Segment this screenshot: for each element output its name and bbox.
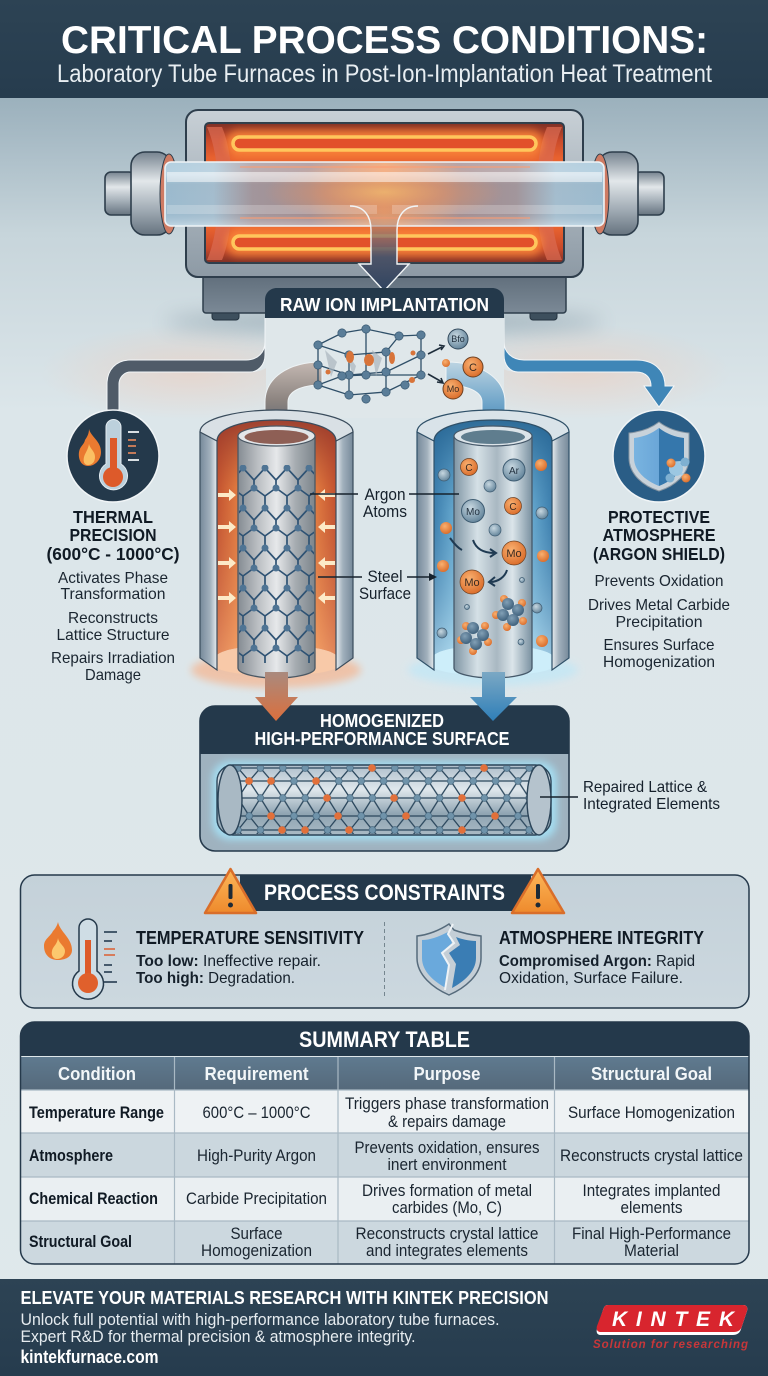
arrow: lattice to left cylinder	[253, 362, 322, 439]
panel: homogenized surface: HOMOGENIZED	[320, 711, 444, 731]
text block: thermal precision: THERMAL	[73, 507, 153, 527]
gas atoms	[437, 459, 549, 647]
table row: atmosphere: Prevents oxidation, ensures	[354, 1139, 540, 1157]
labelled atoms: Mo	[506, 548, 522, 560]
text block: thermal precision: PRECISION	[70, 525, 156, 545]
labelled atoms: Mo	[464, 577, 480, 589]
icon: thermometer	[44, 919, 117, 999]
footer body: Expert R&D for thermal precision & atmosphere integrity.	[20, 1327, 416, 1346]
table row: temperature range: 600°C – 1000°C	[202, 1104, 311, 1122]
steel tube	[454, 436, 532, 678]
table header row	[58, 1063, 712, 1084]
panel: homogenized surface: HIGH-PERFORMANCE SURFACE	[254, 729, 510, 749]
icon: argon shield badge	[613, 410, 705, 502]
constraints heading	[240, 875, 531, 911]
table row: chemical reaction: Carbide Precipitation	[186, 1190, 327, 1208]
table row: chemical reaction	[29, 1182, 720, 1217]
panel header	[200, 706, 569, 754]
table row: structural goal: Surface	[230, 1225, 282, 1243]
table row: atmosphere: Atmosphere	[29, 1147, 113, 1165]
logo: kintek: Solution for researching	[593, 1339, 748, 1351]
table row: atmosphere: High-Purity Argon	[197, 1147, 316, 1165]
table row: structural goal: Reconstructs crystal lattice	[356, 1225, 538, 1243]
callout: argon atoms	[310, 486, 459, 521]
footer body: Unlock full potential with high-performance laboratory tube furnaces.	[20, 1310, 500, 1329]
table row: structural goal: and integrates elements	[366, 1242, 528, 1260]
icon: thermometer badge	[67, 410, 159, 502]
text block: atmosphere integrity: Compromised Argon: Rapid	[499, 953, 695, 970]
panel: homogenized surface	[200, 706, 569, 851]
table heading: SUMMARY TABLE	[299, 1027, 470, 1052]
raw ion implantation label: RAW ION IMPLANTATION	[280, 294, 489, 315]
repaired lattice on tube	[239, 465, 314, 663]
logo: kintek	[593, 1305, 748, 1351]
heat arrows	[218, 489, 335, 604]
labelled atoms	[460, 458, 526, 594]
panel: atmosphere cylinder	[408, 410, 578, 686]
table row: temperature range: Temperature Range	[29, 1104, 164, 1122]
top heating element	[226, 130, 543, 157]
callout: argon atoms: Argon	[364, 486, 406, 504]
text block: protective atmosphere: (ARGON SHIELD)	[593, 544, 725, 564]
icon: warning right	[512, 869, 564, 913]
callout: steel surface: Steel	[368, 568, 402, 586]
table row: structural goal: Final High-Performance	[572, 1225, 731, 1243]
callout: repaired lattice: Integrated Elements	[583, 796, 720, 813]
table header row: Requirement	[204, 1063, 308, 1084]
arrow: to protective atmosphere	[504, 318, 674, 407]
tube furnace illustration	[105, 110, 664, 320]
table row: structural goal: Homogenization	[201, 1242, 312, 1260]
carbide cluster 2	[457, 622, 492, 655]
table row: atmosphere	[29, 1139, 743, 1174]
flow: light frame around raw ion implantation	[107, 318, 674, 418]
steel tube	[238, 436, 315, 678]
ejected ions	[428, 329, 483, 399]
text block: protective atmosphere: Prevents Oxidation	[594, 573, 724, 590]
table row: chemical reaction: carbides (Mo, C)	[392, 1199, 502, 1217]
table header row: Condition	[58, 1063, 136, 1084]
footer url: kintekfurnace.com	[20, 1347, 158, 1367]
arrow: thermal cylinder to surface	[255, 672, 298, 721]
text block: temperature sensitivity	[136, 927, 365, 987]
arrow: lattice to right cylinder	[446, 362, 517, 439]
text block: protective atmosphere: PROTECTIVE	[608, 507, 710, 527]
arrow: atmosphere cylinder to surface	[470, 672, 517, 721]
text block: thermal precision: Lattice Structure	[56, 627, 170, 644]
table row: structural goal	[29, 1225, 731, 1260]
text block: thermal precision: Damage	[85, 667, 141, 684]
table row: chemical reaction: Chemical Reaction	[29, 1190, 158, 1208]
text block: thermal precision	[46, 507, 180, 684]
text block: thermal precision: Activates Phase	[58, 570, 168, 587]
text block: protective atmosphere: Homogenization	[603, 654, 715, 671]
callout: argon atoms: Atoms	[363, 503, 407, 521]
outer walls	[417, 432, 434, 670]
text block: protective atmosphere: Drives Metal Carbide	[588, 597, 730, 614]
argon chamber interior	[434, 416, 552, 655]
labelled atoms: C	[509, 502, 517, 513]
title: CRITICAL PROCESS CONDITIONS:	[61, 19, 708, 62]
table row: chemical reaction: Drives formation of metal	[362, 1182, 532, 1200]
footer	[0, 1279, 768, 1376]
callout: repaired lattice	[540, 779, 720, 813]
title banner	[0, 0, 768, 98]
text block: protective atmosphere: Ensures Surface	[604, 637, 715, 654]
raw ion implantation label	[265, 288, 504, 318]
table row: atmosphere: inert environment	[388, 1156, 507, 1174]
text block: temperature sensitivity: TEMPERATURE SENSITIVITY	[136, 927, 365, 948]
callout: steel surface	[318, 568, 437, 603]
text block: thermal precision: Reconstructs	[68, 610, 158, 627]
panel: thermal cylinder	[191, 410, 361, 688]
right flange	[591, 152, 664, 235]
labelled atoms: Mo	[466, 507, 480, 518]
quartz tube	[165, 161, 604, 226]
callout: repaired lattice: Repaired Lattice &	[583, 779, 707, 796]
bottom heating element	[226, 229, 543, 256]
text block: protective atmosphere: Precipitation	[616, 614, 702, 631]
ejected ions: Bfo	[451, 334, 465, 344]
ejected ions: C	[469, 362, 477, 374]
table row: chemical reaction: elements	[620, 1199, 682, 1217]
table row: temperature range: & repairs damage	[388, 1113, 506, 1131]
constraints heading: PROCESS CONSTRAINTS	[264, 880, 505, 905]
text block: temperature sensitivity: Too low: Ineffective repair.	[136, 953, 321, 970]
footer body	[20, 1310, 500, 1346]
table row: temperature range: Triggers phase transformation	[345, 1095, 549, 1113]
table header row: Purpose	[414, 1063, 480, 1084]
text block: thermal precision: Repairs Irradiation	[51, 650, 175, 667]
labelled atoms: Ar	[509, 466, 520, 477]
table row: structural goal: Material	[624, 1242, 679, 1260]
text block: temperature sensitivity: Too high: Degradation.	[136, 970, 295, 987]
table row: temperature range: Surface Homogenization	[568, 1104, 735, 1122]
icon: warning left	[205, 869, 256, 913]
reaction arrows	[450, 538, 507, 586]
text block: atmosphere integrity	[499, 927, 705, 987]
ejected ions: Mo	[447, 384, 459, 394]
text block: thermal precision: (600°C - 1000°C)	[46, 544, 180, 564]
summary table	[20, 1022, 749, 1264]
text block: atmosphere integrity: ATMOSPHERE INTEGRITY	[499, 927, 705, 948]
text block: atmosphere integrity: Oxidation, Surface Failure.	[499, 970, 683, 987]
table row: structural goal: Structural Goal	[29, 1233, 132, 1251]
furnace body	[186, 110, 583, 277]
table row: temperature range	[29, 1095, 735, 1131]
hot chamber interior	[217, 416, 336, 655]
table row: atmosphere: Reconstructs crystal lattice	[560, 1147, 743, 1165]
furnace base	[203, 270, 566, 320]
carbide cluster 1	[492, 595, 527, 631]
logo: kintek: KINTEK	[612, 1308, 736, 1331]
text block: thermal precision: Transformation	[60, 586, 166, 603]
icon: broken shield	[417, 924, 481, 995]
panel: process constraints	[20, 869, 749, 1008]
arrow: furnace down to raw ion implantation	[350, 206, 418, 291]
outer walls	[200, 432, 217, 670]
arrow: to thermal precision	[107, 318, 265, 410]
table header row: Structural Goal	[591, 1063, 712, 1084]
labelled atoms: C	[465, 463, 473, 474]
footer headline: ELEVATE YOUR MATERIALS RESEARCH WITH KINTEK PRECISION	[20, 1287, 548, 1308]
text block: protective atmosphere	[588, 507, 730, 671]
table row: chemical reaction: Integrates implanted	[582, 1182, 720, 1200]
text block: protective atmosphere: ATMOSPHERE	[602, 525, 716, 545]
left flange	[105, 152, 178, 235]
damaged crystal lattice	[314, 325, 425, 403]
callout: steel surface: Surface	[359, 585, 411, 603]
glowing lattice tube	[212, 761, 557, 840]
